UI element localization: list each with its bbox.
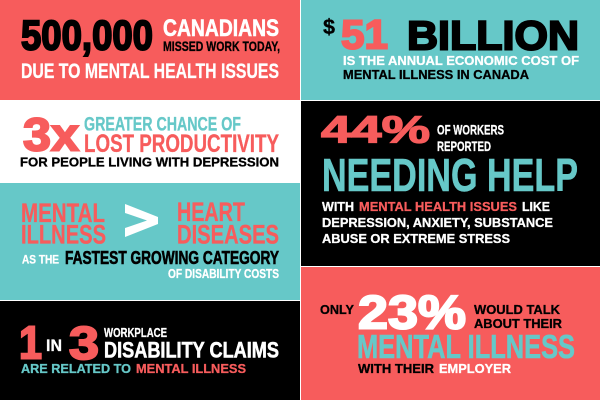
panel: mental illness vs heart diseases: OF DISABILITY COSTS [168,266,279,281]
panel: 1 in 3 disability claims: IN [46,336,62,355]
panel: 44% needing help: OF WORKERS [437,122,504,138]
panel: 51 billion: MENTAL ILLNESS IN CANADA [343,67,530,82]
panel: 500,000 Canadians: DUE TO MENTAL HEALTH ISSUES [21,60,279,83]
panel: 1 in 3 disability claims: ARE RELATED TO [21,361,131,376]
panel: 1 in 3 disability claims [0,301,300,400]
panel: 51 billion: IS THE ANNUAL ECONOMIC COST OF [343,53,579,68]
panel: 44% needing help: MENTAL HEALTH ISSUES [359,199,517,214]
panel: 44% needing help [301,101,600,266]
panel: 44% needing help: ABUSE OR EXTREME STRESS [322,231,510,246]
panel: only 23% would talk: ONLY [320,302,354,317]
panel: 1 in 3 disability claims: 3 [69,317,99,369]
panel: 3x lost productivity: LOST PRODUCTIVITY [84,130,279,158]
panel: 3x lost productivity: FOR PEOPLE LIVING WITH DEPRESSION [20,156,279,170]
panel: 1 in 3 disability claims: DISABILITY CLAIMS [104,338,279,362]
icon: greater-than sign [125,204,158,237]
panel: 1 in 3 disability claims: 1 [19,316,42,368]
panel: 51 billion [301,0,600,100]
panel: 51 billion: $ [323,16,335,39]
panel: 44% needing help: 44% [321,110,430,152]
panel: 3x lost productivity [0,100,300,183]
panel: 51 billion: 51 [341,12,388,58]
panel: 1 in 3 disability claims: WORKPLACE [104,325,167,340]
panel: 500,000 Canadians [0,0,300,100]
panel: mental illness vs heart diseases: HEART [177,197,245,227]
panel: mental illness vs heart diseases: ILLNESS [21,220,106,250]
panel: only 23% would talk [301,267,600,400]
panel: 3x lost productivity: 3x [23,108,79,160]
panel: only 23% would talk: WITH THEIR [358,361,435,376]
panel: 500,000 Canadians: CANADIANS [163,15,279,42]
panel: 44% needing help: DEPRESSION, ANXIETY, SUBSTANCE [322,215,553,230]
panel: 44% needing help: WITH [322,199,354,214]
panel: 44% needing help: REPORTED [437,139,491,154]
panel: 500,000 Canadians: 500,000 [21,12,153,58]
panel: only 23% would talk: WOULD TALK [474,302,561,317]
panel: 44% needing help: LIKE [522,199,550,214]
panel: 500,000 Canadians: MISSED WORK TODAY, [163,38,280,54]
panel: mental illness vs heart diseases [0,183,300,300]
panel: mental illness vs heart diseases: MENTAL [21,198,105,228]
panel: only 23% would talk: 23% [358,286,466,338]
panel: only 23% would talk: ABOUT THEIR [474,316,563,331]
panel: mental illness vs heart diseases: DISEASES [177,220,279,250]
panel: mental illness vs heart diseases: FASTEST GROWING CATEGORY [65,248,279,268]
panel: mental illness vs heart diseases: AS THE [22,252,59,266]
panel: only 23% would talk: EMPLOYER [439,361,512,376]
panel: 51 billion: BILLION [407,12,579,58]
panel: 3x lost productivity: GREATER CHANCE OF [84,114,241,136]
panel: 1 in 3 disability claims: MENTAL ILLNESS [136,361,246,376]
